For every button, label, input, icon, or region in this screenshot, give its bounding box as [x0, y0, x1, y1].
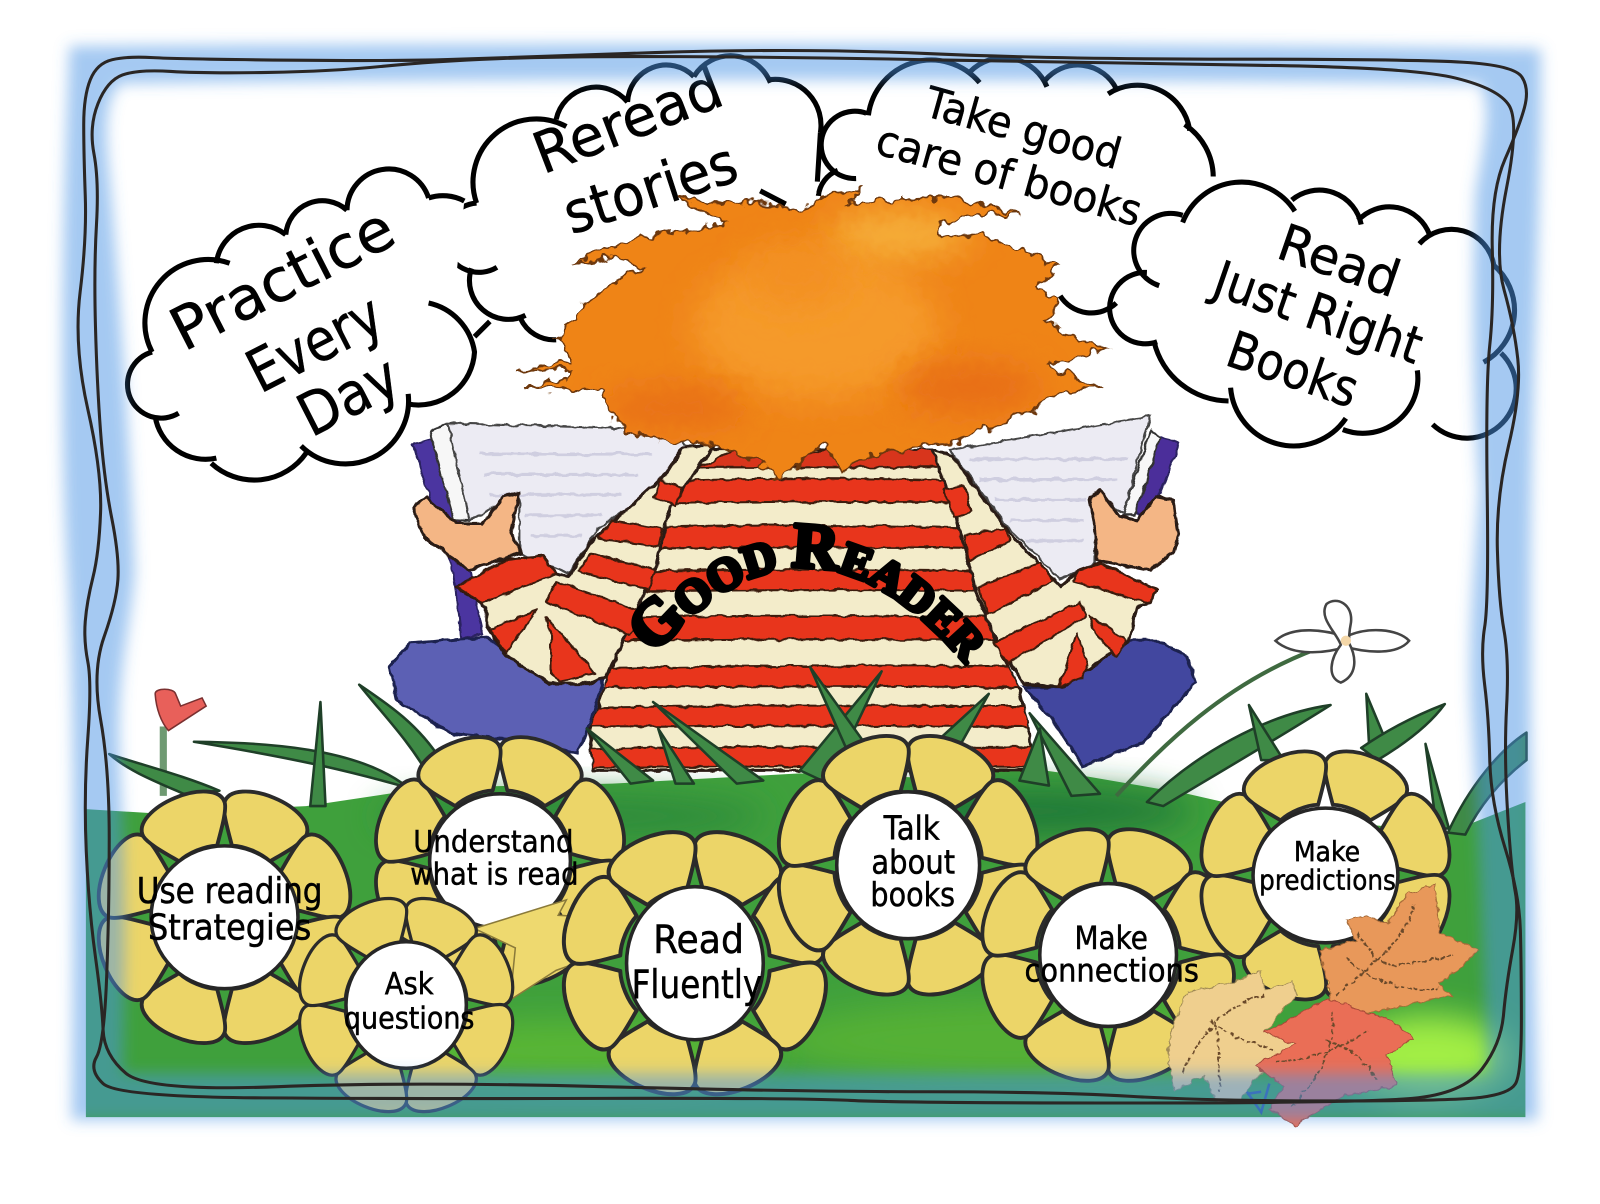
text: stories: stories — [555, 130, 746, 248]
blue trousers right — [1023, 640, 1196, 766]
text: Books: Books — [1219, 321, 1366, 420]
text: Understand what is read: what is read — [410, 858, 579, 893]
text: Talk about books: about — [871, 843, 955, 881]
left open book — [413, 423, 687, 638]
right sleeve — [933, 450, 1156, 687]
striped shirt torso — [582, 444, 1033, 770]
right open book — [950, 416, 1180, 580]
left sleeve — [456, 445, 714, 684]
grass and wildflowers behind the reader — [109, 601, 1526, 835]
text: Read Fluently: Fluently — [632, 963, 762, 1008]
text: Understand what is read: Understand — [413, 825, 573, 860]
text: Take good: Take good — [919, 77, 1127, 180]
flower: Make connections — [972, 819, 1244, 1091]
left hand — [413, 493, 521, 570]
icon: white flower — [1116, 601, 1409, 796]
illustration: child reading from behind — [388, 185, 1198, 798]
text: Make predictions: predictions — [1259, 865, 1396, 897]
body, books and hands with a hand-drawn wobble — [390, 416, 1196, 770]
grass blades in front of the shirt — [587, 667, 1100, 796]
leaf tips — [1247, 1084, 1269, 1112]
text: Make predictions: Make — [1294, 836, 1360, 868]
leaf: tan — [1167, 970, 1297, 1103]
orange hair — [516, 185, 1113, 481]
grass blades right — [1147, 694, 1526, 835]
text: Every: Every — [235, 280, 394, 406]
flower: Use reading strategies — [88, 781, 361, 1054]
scribbled outer frame line — [78, 50, 1526, 1101]
text: Just Right: Just Right — [1203, 249, 1430, 377]
text: Reread: Reread — [524, 55, 732, 188]
leaf: red — [1254, 998, 1414, 1125]
text: Make connections: connections — [1024, 954, 1199, 990]
text: Day: Day — [286, 341, 410, 450]
blue trousers left — [390, 637, 603, 753]
text: Read: Read — [1270, 214, 1407, 310]
flower: Make predictions — [1191, 741, 1460, 1010]
text: Use reading Strategies: Strategies — [148, 908, 311, 949]
ground: green hill — [86, 767, 1525, 1117]
text: Make connections: Make — [1074, 921, 1148, 957]
right hand — [1090, 490, 1179, 570]
thought cloud: Practice Every Day — [127, 163, 475, 481]
thought cloud: Reread stories — [444, 55, 821, 340]
text: care of books: care of books — [871, 115, 1147, 237]
autumn leaves — [1167, 885, 1479, 1125]
text: Ask questions: Ask — [385, 967, 434, 1002]
text: Read Fluently: Read — [653, 918, 744, 963]
flower: Understand what is read — [366, 727, 634, 996]
text: Use reading Strategies: Use reading — [137, 871, 322, 912]
thought cloud: Read Just Right Books — [1110, 182, 1516, 458]
flower: Read Fluently — [553, 821, 837, 1105]
text: Practice: Practice — [159, 193, 406, 364]
text: Talk about books: books — [870, 876, 955, 914]
thought cloud: Take good care of books — [818, 57, 1213, 313]
yellow ribbon banner — [475, 900, 599, 1000]
scribbled inner frame line — [92, 57, 1519, 1103]
text: Talk about books: Talk — [883, 810, 940, 848]
curved title: Good Reader: GOOD READER — [631, 522, 984, 666]
grass blades left — [109, 685, 441, 806]
flower: Talk about books — [768, 725, 1048, 1005]
text: Ask questions: questions — [344, 1002, 475, 1037]
icon: red tulip — [155, 689, 206, 796]
flower: Ask questions — [291, 890, 522, 1121]
leaf: orange — [1320, 885, 1479, 1013]
